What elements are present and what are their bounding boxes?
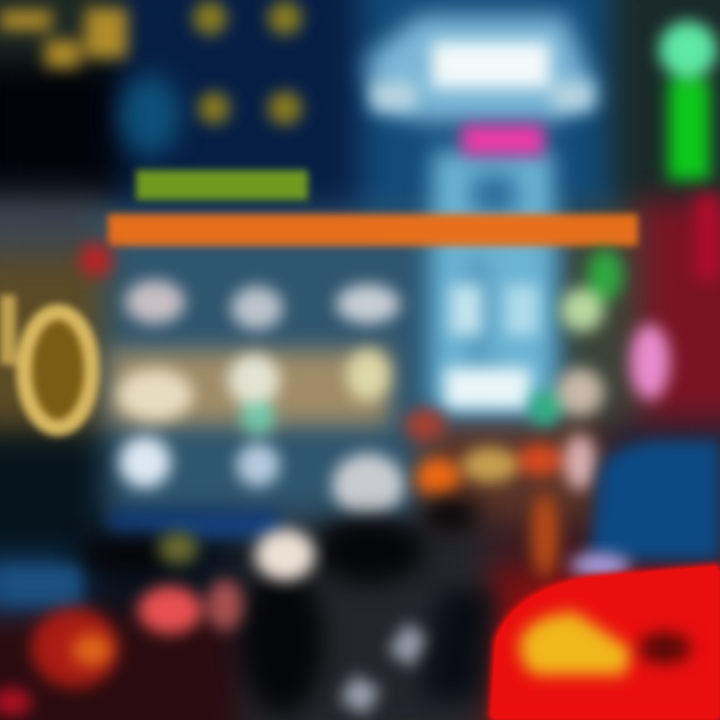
car roof edge (570, 553, 630, 577)
dark silhouettes (80, 497, 480, 715)
colourful street lights (405, 409, 596, 577)
blue sign glow (120, 75, 180, 155)
tan band of the sign panel (110, 350, 390, 425)
road edge (420, 590, 495, 700)
road markings (340, 622, 432, 715)
tower (365, 15, 600, 410)
right side signs (530, 195, 720, 426)
tower highlights and neon signs (372, 42, 592, 408)
gold lettering top left (0, 8, 127, 68)
traffic lights bottom left (0, 529, 315, 716)
green neon sign (659, 21, 717, 180)
panel of signs with pale lights (110, 280, 404, 538)
car headlight (520, 612, 632, 675)
green-yellow sign (136, 170, 308, 200)
gold ring sign (0, 295, 96, 428)
car mirror (639, 632, 691, 664)
orange sign band (108, 214, 638, 246)
red lantern (79, 243, 113, 277)
car windscreen (590, 440, 720, 560)
car body (490, 565, 720, 720)
red car (490, 440, 720, 720)
window lights (193, 1, 302, 125)
